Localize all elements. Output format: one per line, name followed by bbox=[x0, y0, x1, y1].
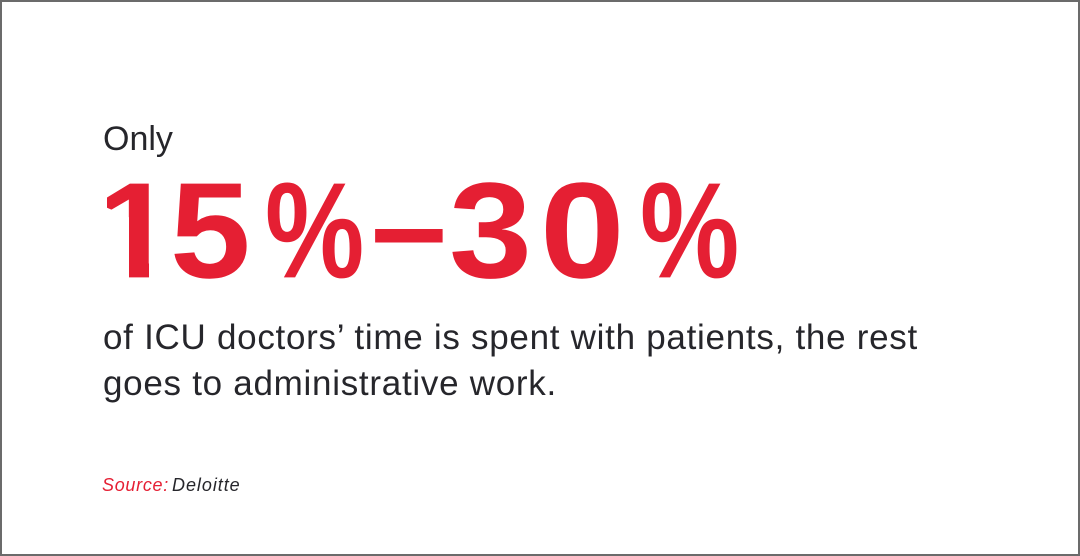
description text: of ICU doctors’ time is spent with patients, the rest bbox=[103, 318, 918, 357]
headline statistic: % bbox=[640, 154, 739, 306]
headline statistic: 1 bbox=[95, 154, 176, 306]
source line bbox=[102, 475, 241, 495]
headline statistic: 0 bbox=[540, 154, 625, 306]
source line: Deloitte bbox=[172, 475, 241, 495]
headline statistic: – bbox=[371, 149, 447, 302]
headline statistic bbox=[107, 149, 739, 306]
headline statistic: 3 bbox=[449, 154, 532, 306]
intro text: Only: Only bbox=[103, 120, 173, 158]
description text bbox=[103, 318, 918, 403]
headline statistic: 5 bbox=[170, 154, 251, 306]
source line: Source: bbox=[102, 475, 169, 495]
headline statistic: % bbox=[265, 154, 364, 306]
description text: goes to administrative work. bbox=[103, 364, 557, 403]
